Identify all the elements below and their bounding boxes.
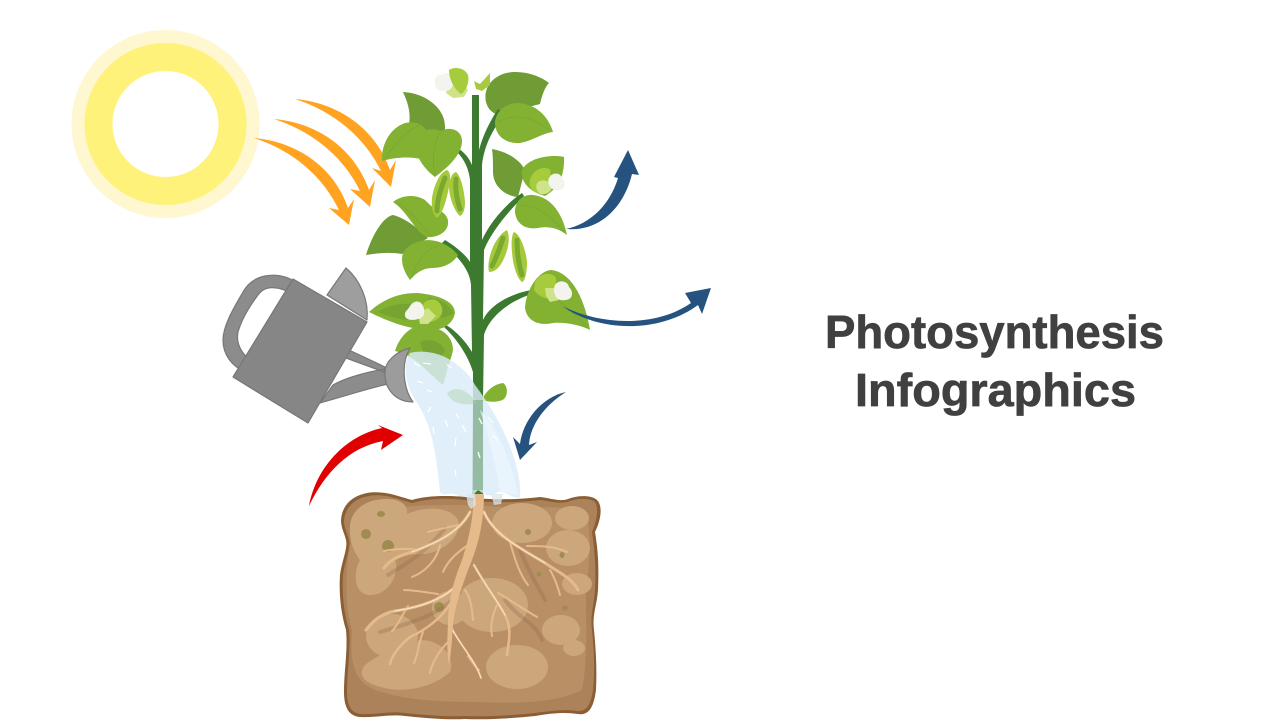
icon: watering can bbox=[223, 268, 413, 423]
arrow: red input bbox=[309, 425, 403, 506]
soil: mineral specks bbox=[361, 511, 568, 612]
watering can: rose bbox=[385, 348, 413, 402]
soil block bbox=[340, 492, 601, 719]
plant: flower right upper bbox=[530, 168, 565, 194]
plant bbox=[366, 68, 590, 495]
soil: outer edge bbox=[340, 492, 601, 719]
water stream bbox=[406, 352, 520, 500]
watering can: spout arm bbox=[320, 350, 388, 403]
soil: pale patches bbox=[350, 499, 592, 690]
plant: flower left bbox=[405, 299, 442, 324]
title: Infographics bbox=[855, 364, 1136, 416]
soil: roots bbox=[366, 512, 578, 678]
soil: root highlights bbox=[395, 512, 545, 678]
soil: inner layer bbox=[346, 505, 590, 703]
plant: bean pods bbox=[432, 170, 527, 282]
plant: leaf shading bbox=[378, 298, 453, 360]
watering can: body bbox=[233, 279, 367, 423]
arrow: transpiration upper bbox=[566, 150, 639, 229]
icon: sun bbox=[72, 30, 260, 218]
plant: bright leaves bbox=[369, 103, 590, 404]
title bbox=[825, 306, 1164, 416]
soil: mid layer bbox=[343, 495, 597, 716]
arrows: sunlight bbox=[254, 99, 396, 225]
watering can: handle bbox=[223, 275, 292, 372]
plant: leaf veins bbox=[386, 117, 588, 328]
soil: water drips on surface bbox=[466, 494, 503, 509]
arrow: carbon dioxide down bbox=[513, 392, 566, 460]
plant: back dark leaves bbox=[366, 72, 549, 255]
title: Photosynthesis bbox=[825, 306, 1164, 358]
soil: dark root shadows bbox=[380, 528, 545, 640]
soil: taproot bbox=[447, 494, 484, 664]
plant: stem and branches bbox=[442, 95, 532, 495]
watering can: cover bbox=[327, 268, 367, 320]
arrow: transpiration lower bbox=[562, 288, 711, 326]
plant: flower top bbox=[435, 68, 490, 98]
plant: flower right lower bbox=[534, 274, 572, 302]
